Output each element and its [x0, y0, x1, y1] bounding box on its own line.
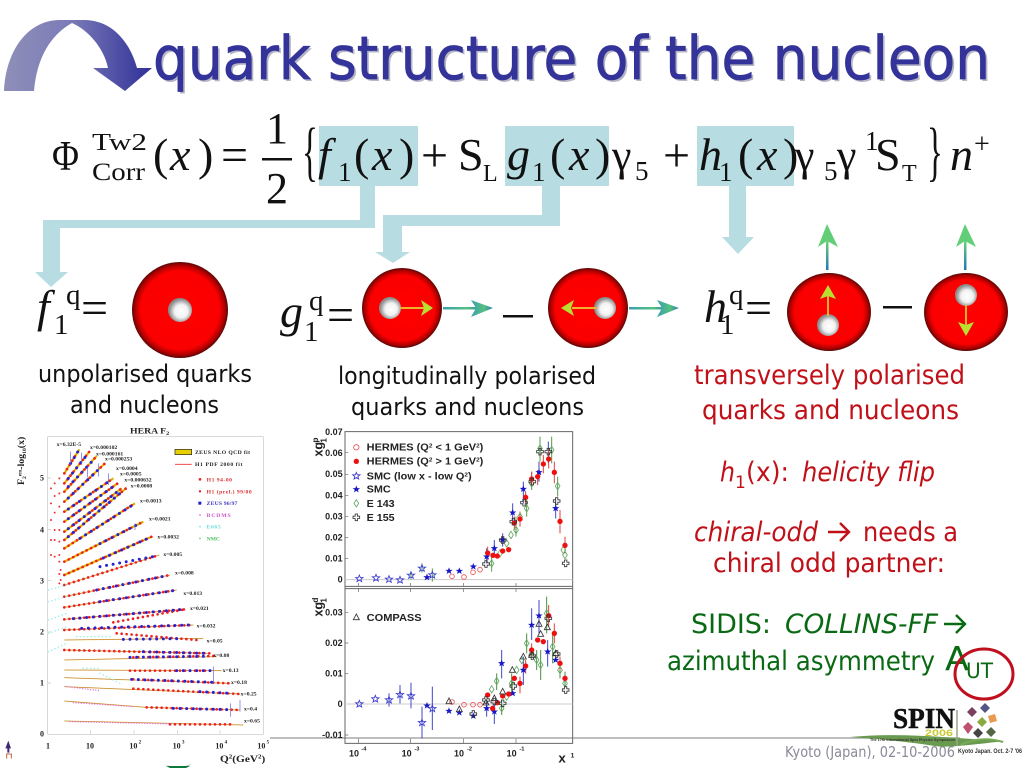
bottom panel error bars — [497, 597, 565, 715]
x axis labels: x — [558, 751, 566, 766]
y axis labels: 3 — [40, 576, 44, 585]
axis ticks — [345, 453, 516, 743]
ZEUS blue points — [68, 449, 232, 710]
text: helicity flip: helicity flip — [802, 457, 935, 488]
x axis title: (GeV — [232, 754, 258, 765]
zero lines — [345, 580, 573, 704]
arrow: g1 to longitudinal — [375, 186, 560, 263]
chart: HERA F2 structure function — [16, 426, 270, 765]
x axis labels: 10 — [215, 741, 223, 750]
legend: ZEUS 96/97 — [207, 501, 238, 507]
x bin labels: x=0.000161 — [96, 451, 123, 457]
small icon: footer left emblem — [5, 741, 11, 759]
x bin labels: x=0.000102 — [90, 445, 117, 451]
legend: NMC — [207, 536, 220, 542]
formula: + — [974, 129, 990, 160]
x bin labels: x=0.000632 — [124, 478, 152, 484]
text: SIDIS: UT — [966, 659, 993, 683]
formula: γ — [794, 131, 814, 180]
top panel y labels: 0.06 — [325, 448, 343, 458]
NMC and BCDMS points — [67, 687, 173, 724]
text: helicity flip — [720, 457, 935, 493]
top legend: > 1 GeV — [432, 457, 477, 468]
x axis labels: 1 — [46, 741, 50, 750]
green E143 diamonds — [489, 445, 567, 712]
x axis labels: 10 — [257, 741, 265, 750]
x axis labels: 2 — [139, 740, 142, 745]
bottom legend: COMPASS — [367, 613, 422, 624]
top panel y labels — [325, 427, 343, 585]
formula: 1 — [338, 157, 352, 187]
highlight box: g1(x) — [505, 126, 609, 186]
arrow: spin up 2 — [956, 224, 976, 270]
y axis labels: 0 — [40, 730, 44, 739]
x bin labels: x=0.032 — [197, 623, 216, 629]
formula: ( — [550, 129, 565, 180]
text: unpolarised — [38, 360, 252, 419]
formula: 1 — [865, 126, 878, 156]
top panel error bars — [411, 437, 558, 582]
H1 red points — [64, 449, 240, 724]
top legend: 2 — [476, 443, 480, 449]
top legend — [353, 443, 483, 524]
bottom panel y labels: 0.01 — [325, 668, 343, 678]
f1 equals label: q — [66, 279, 80, 311]
formula: = — [221, 129, 248, 182]
formula: S — [458, 129, 484, 180]
formula: x — [371, 129, 393, 180]
h1 equals label: q — [729, 279, 744, 311]
top panel y labels: 0.03 — [325, 511, 343, 521]
red open circles — [450, 567, 482, 707]
formula: 1 — [266, 104, 288, 153]
top panel y labels: 0.01 — [325, 553, 343, 563]
x axis labels: 10 — [349, 749, 359, 759]
icon: curved navigation arrow — [4, 20, 152, 91]
formula: x — [169, 129, 191, 180]
text: helicity flip: (x): — [746, 457, 789, 488]
formula: 5 — [635, 156, 648, 186]
formula: ) — [783, 129, 798, 180]
arrow: f1 to unpolarised — [35, 186, 375, 287]
text: SIDIS: azimuthal asymmetry — [667, 646, 935, 677]
top legend: 2 — [429, 443, 432, 449]
formula: n — [950, 129, 973, 180]
top legend: HERMES (Q — [367, 443, 421, 454]
x axis labels: -4 — [361, 747, 367, 753]
top legend: SMC — [367, 485, 391, 496]
text: transverse — [694, 360, 965, 426]
black open crosses — [470, 448, 569, 717]
formula: x — [756, 129, 778, 180]
f1 equals label: f — [37, 281, 56, 332]
formula: 1 — [719, 157, 732, 187]
x axis labels: 10 — [173, 741, 181, 750]
text: SIDIS: COLLINS-FF — [785, 609, 938, 640]
top panel y labels: 0.02 — [325, 532, 343, 542]
f1 equals label: = — [81, 282, 108, 335]
top legend: SMC (low x - low Q — [367, 472, 453, 483]
text: transverse: quarks and nucleons — [702, 395, 959, 426]
x axis labels: 10 — [507, 749, 517, 759]
formula: γ — [836, 131, 856, 180]
logo: SPIN 2006: SPIN — [893, 703, 955, 735]
red filled circles — [485, 456, 568, 711]
x bin labels: x=0.000253 — [105, 457, 132, 463]
text: unpolarised: unpolarised quarks — [38, 360, 252, 388]
nucleon: quark parallel — [362, 268, 442, 348]
text: chiral-odd — [694, 517, 958, 579]
arrow: nucleon spin right — [443, 300, 493, 317]
formula: { — [302, 116, 318, 188]
x bin labels: x=0.005 — [163, 552, 182, 558]
highlight box: h1(x) — [697, 126, 794, 186]
x bin labels: x=0.008 — [175, 570, 194, 576]
text: helicity flip: 1 — [735, 473, 746, 493]
x axis title: Q — [220, 754, 228, 765]
formula: x — [568, 129, 590, 180]
nucleon: quark antiparallel — [548, 268, 628, 348]
legend: ZEUS NLO QCD fit — [195, 450, 250, 456]
text: helicity flip: h — [720, 457, 735, 488]
y axis title bottom — [310, 598, 329, 617]
text: SIDIS: A — [945, 639, 969, 678]
x bin labels: x=6.32E-5 — [57, 442, 81, 448]
formula: ( — [354, 129, 369, 180]
top legend: E 155 — [367, 513, 395, 524]
formula: Tw2 — [92, 130, 147, 156]
y axis title top: 1 — [320, 438, 329, 443]
legend: H1 (prel.) 99/00 — [207, 488, 252, 495]
x bin labels: x=0.021 — [190, 606, 209, 612]
formula: 1 — [532, 157, 546, 187]
formula: γ — [611, 131, 631, 180]
y axis labels — [40, 474, 44, 739]
h1 equals label — [704, 279, 772, 341]
x bin labels: x=0.0021 — [149, 516, 171, 522]
formula: ) — [595, 129, 610, 180]
formula: S — [875, 129, 901, 180]
E665 cyan points — [48, 585, 120, 683]
top legend: ) — [480, 457, 483, 468]
x bin labels: x=0.0004 — [116, 466, 138, 472]
formula: + — [663, 129, 690, 182]
formula: Φ — [52, 134, 79, 180]
top legend: 2 — [464, 472, 468, 478]
fit bands — [64, 449, 152, 575]
formula: ( — [738, 129, 753, 180]
x axis labels: 10 — [454, 749, 464, 759]
x axis labels: 10 — [402, 749, 412, 759]
formula: h — [699, 129, 722, 180]
footer text: Kyoto (Japan), 02-10-2006 — [785, 743, 955, 761]
minus sign — [503, 315, 533, 318]
text: unpolarised: and nucleons — [70, 391, 219, 419]
bottom panel y labels — [322, 607, 343, 740]
h1 equals label: 1 — [720, 309, 734, 341]
top panel y labels: 0.04 — [325, 490, 343, 500]
y axis title: 10 — [22, 448, 28, 454]
x bin labels: x=0.13 — [223, 668, 239, 674]
x axis labels — [46, 740, 270, 750]
formula: T — [902, 161, 917, 187]
text: chiral-odd: chiral odd partner: — [713, 548, 945, 579]
text: SIDIS: SIDIS: — [691, 609, 771, 640]
x axis title: 2 — [258, 755, 262, 761]
logo: SPIN 2006: The 17th International Spin Physics Symposium — [870, 737, 955, 742]
error bars — [71, 452, 240, 717]
chart: xg1 polarised structure functions — [310, 427, 575, 766]
bottom panel y labels: 0.03 — [325, 607, 343, 617]
blue filled stars — [423, 469, 559, 719]
y axis labels: 2 — [40, 628, 44, 637]
formula — [52, 104, 990, 213]
top legend: ) — [480, 443, 483, 454]
formula: f — [318, 129, 337, 180]
y axis title: 2 — [22, 476, 28, 479]
x bin labels: x=0.0013 — [140, 499, 162, 505]
text: longitudinal — [338, 362, 596, 421]
g1 equals label: q — [309, 285, 324, 317]
x axis labels: 4 — [225, 740, 228, 745]
minus sign — [883, 306, 912, 308]
highlight box: f1(x) — [319, 126, 418, 186]
text: chiral-odd: needs a — [863, 517, 958, 548]
top legend: HERMES (Q — [367, 457, 421, 468]
legend — [175, 449, 252, 542]
decorative green arc at bottom — [164, 764, 191, 768]
y axis title: em — [18, 470, 23, 476]
y axis labels: 4 — [40, 525, 44, 534]
footer line — [270, 737, 960, 739]
f1 equals label: 1 — [54, 309, 68, 341]
bottom panel y labels: -0.01 — [322, 730, 343, 740]
legend: BCDMS — [207, 513, 231, 519]
g1 equals label: = — [327, 289, 354, 342]
f1 equals label — [37, 279, 108, 341]
formula: ) — [198, 129, 213, 180]
g1 equals label — [280, 285, 354, 348]
top legend: E 143 — [367, 499, 395, 510]
plot frame — [345, 432, 573, 743]
top panel y labels: 0.05 — [325, 469, 343, 479]
formula: g — [507, 129, 530, 180]
formula: + — [421, 129, 448, 182]
formula: L — [483, 161, 498, 187]
x bin labels: x=0.18 — [231, 680, 247, 686]
x axis labels: 5 — [267, 740, 270, 745]
black open triangles — [446, 621, 559, 712]
legend: E665 — [207, 525, 221, 531]
x axis labels: -2 — [467, 747, 472, 753]
arrow: spin up — [818, 224, 838, 270]
text: transverse: transversely polarised — [694, 360, 965, 391]
x bin labels: x=0.0032 — [157, 534, 179, 540]
x bin labels: x=0.0008 — [131, 484, 152, 490]
legend: H1 94-00 — [207, 477, 232, 483]
x bin labels: x=0.08 — [213, 653, 229, 659]
x axis title: ) — [262, 754, 265, 765]
text: longitudinal: longitudinally polarised — [338, 362, 596, 390]
logo: SPIN 2006 — [850, 703, 1023, 755]
y axis title bottom: xg — [312, 602, 326, 617]
text: longitudinal: quarks and nucleons — [351, 393, 584, 421]
top legend: 2 — [476, 457, 480, 463]
arrow: nucleon spin right 2 — [629, 300, 679, 317]
y axis labels: 1 — [40, 679, 44, 688]
text: chiral-odd: chiral-odd — [694, 517, 819, 548]
y axis title: -log — [17, 454, 27, 470]
x axis labels — [349, 747, 575, 766]
x bin labels: x=0.4 — [244, 707, 257, 713]
x axis title: 2 — [229, 755, 232, 761]
x axis labels: 10 — [129, 741, 137, 750]
formula: } — [927, 116, 943, 188]
top panel y labels: 0 — [338, 575, 343, 585]
x axis labels: 10 — [86, 741, 94, 750]
nucleon: transverse up — [787, 273, 871, 351]
x bin labels: x=0.013 — [183, 591, 202, 597]
y axis title bottom: 1 — [320, 598, 329, 603]
chart title: HERA F — [130, 426, 160, 435]
arrow: h1 to transverse — [722, 186, 754, 254]
y axis title bottom: d — [310, 598, 320, 603]
callout: red circle around UT — [955, 649, 1013, 699]
g1 equals label: g — [280, 286, 303, 337]
y axis title: F — [17, 479, 27, 485]
x bin labels: x=0.25 — [241, 692, 257, 698]
formula: Corr — [92, 159, 146, 186]
text: SIDIS — [667, 609, 993, 683]
x axis labels: 1 — [571, 752, 575, 759]
x bin labels: x=0.65 — [244, 719, 260, 725]
formula: ( — [153, 129, 168, 180]
low x extra H1 points — [51, 478, 61, 583]
x bin labels — [57, 442, 260, 725]
x bin labels: x=0.05 — [207, 638, 223, 644]
x axis labels: -1 — [519, 747, 524, 753]
blue open stars — [356, 565, 436, 726]
logo: SPIN 2006: 2006 — [925, 728, 953, 738]
top panel y labels: 0.07 — [325, 427, 343, 437]
y axis title top: p — [310, 438, 320, 443]
chart title: 2 — [166, 431, 170, 437]
h1 equals label: h — [704, 281, 727, 332]
top legend: ) — [468, 472, 472, 483]
nucleon: transverse down — [924, 273, 1008, 351]
formula: ) — [399, 129, 414, 180]
bottom panel y labels: 0 — [338, 699, 343, 709]
y axis labels: 5 — [40, 474, 44, 483]
x axis labels: 3 — [182, 740, 185, 745]
plot frame and ticks — [48, 437, 263, 734]
g1 equals label: 1 — [304, 316, 318, 348]
y axis title top — [310, 438, 329, 457]
bottom legend — [353, 613, 422, 624]
bottom panel y labels: 0.02 — [325, 638, 343, 648]
formula: 5 — [824, 156, 838, 186]
y axis title: (x) — [16, 437, 27, 448]
x bin labels: x=0.0005 — [120, 472, 142, 478]
nucleon: unpolarised — [132, 262, 228, 358]
top legend: < 1 GeV — [432, 443, 477, 454]
x axis labels: -3 — [414, 747, 419, 753]
legend: H1 PDF 2000 fit — [195, 462, 242, 468]
formula: 2 — [266, 164, 288, 213]
fit lines — [64, 449, 243, 725]
y axis title top: xg — [312, 442, 326, 457]
top legend: 2 — [429, 457, 432, 463]
h1 equals label: = — [745, 282, 772, 335]
